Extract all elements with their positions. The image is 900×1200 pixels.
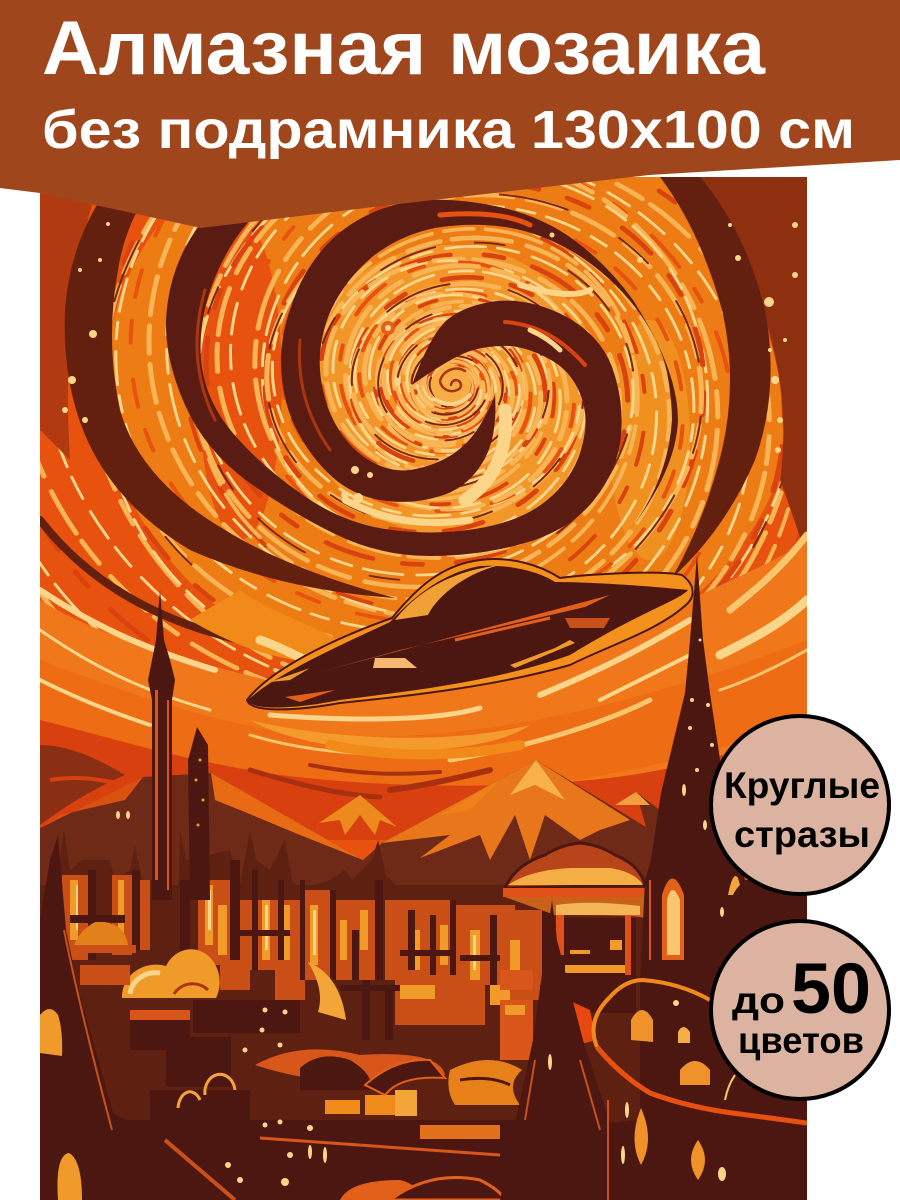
badge: up to 50 colours: цветов bbox=[738, 1020, 864, 1061]
city domes bbox=[74, 922, 346, 1020]
right foreground mass with dome bbox=[500, 555, 807, 1200]
painting: alien city under a swirling sky bbox=[40, 177, 807, 1200]
city base bbox=[40, 885, 660, 1130]
badge: round rhinestones bbox=[711, 716, 889, 894]
badge: up to 50 colours: 50 bbox=[791, 950, 871, 1029]
dark spiral arm A bbox=[166, 222, 622, 556]
badge: up to 50 colours: до bbox=[732, 980, 785, 1021]
dark outer arm left bbox=[65, 185, 395, 598]
foreground town bbox=[127, 1000, 522, 1200]
title: Алмазная мозаика bbox=[42, 6, 766, 91]
flying saucer bbox=[247, 559, 693, 709]
subtitle: без подрамника 130х100 см bbox=[42, 100, 855, 160]
far-right sky corner bbox=[700, 177, 807, 560]
dark spiral arm B bbox=[281, 200, 678, 530]
header banner bbox=[0, 0, 900, 228]
swirl streak texture bbox=[40, 182, 800, 680]
city backdrop spires bbox=[60, 832, 395, 885]
badge: up to 50 colours bbox=[711, 921, 889, 1099]
dark outer arm right bbox=[660, 177, 771, 578]
far-left sky corner bbox=[40, 193, 92, 460]
left tall tower bbox=[116, 590, 210, 900]
distant mountains bbox=[40, 760, 659, 885]
thin dark sweep lower left bbox=[40, 520, 240, 640]
stars bbox=[62, 222, 798, 503]
city orange buildings bbox=[62, 860, 550, 1040]
left foreground hill bbox=[40, 836, 126, 1200]
badge: round rhinestones: стразы bbox=[734, 814, 870, 855]
lower sky bands bbox=[40, 535, 807, 840]
orange streaks over the arms bbox=[197, 214, 585, 450]
badge: round rhinestones: Круглые bbox=[724, 765, 880, 806]
spiral eye bbox=[431, 365, 471, 405]
swirl colour base bbox=[112, 177, 784, 640]
pale spiral highlights bbox=[345, 285, 590, 522]
sky background bbox=[40, 177, 798, 880]
saucer-domed building bbox=[500, 843, 648, 1060]
